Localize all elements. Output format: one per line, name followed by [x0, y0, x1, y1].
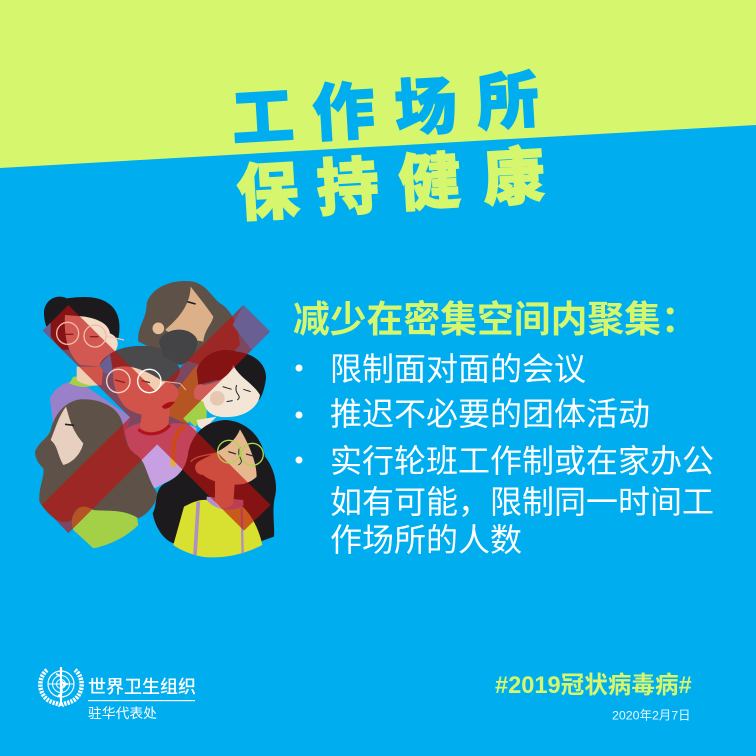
cross ends over background — [43, 305, 270, 373]
person: bottom left — [35, 399, 157, 548]
hashtag: #2019冠状病毒病# — [495, 672, 692, 699]
red cross-out — [42, 305, 271, 533]
title line 2: 健 — [397, 147, 463, 220]
icon: WHO emblem — [40, 667, 82, 706]
title line 1: 所 — [475, 66, 541, 139]
WHO logo: emblem and name — [40, 667, 196, 721]
title line 2: 保 — [235, 157, 301, 230]
title line 1: 工 — [230, 82, 296, 155]
bullet 3: 作场所的人数 — [330, 522, 522, 558]
bullet 3 — [296, 443, 714, 558]
bullet 1: 限制面对面的会议 — [330, 351, 586, 387]
person: top right — [138, 281, 240, 370]
body text panel — [293, 299, 714, 558]
office name: 驻华代表处 — [88, 706, 157, 721]
title line 1 — [230, 66, 541, 155]
person: top left — [44, 297, 130, 443]
title — [230, 66, 541, 155]
bullet 3: 实行轮班工作制或在家办公 — [330, 443, 714, 479]
date: 2020年2月7日 — [612, 708, 691, 722]
title line 2: 康 — [481, 142, 547, 215]
title line 2: 持 — [315, 152, 381, 225]
title line 2 — [235, 142, 547, 230]
bullet 3: 如有可能，限制同一时间工 — [330, 484, 714, 520]
person: bottom right — [153, 420, 276, 557]
title line 1: 场 — [393, 72, 459, 145]
person: centre — [99, 346, 197, 488]
lime diagonal banner — [0, 0, 756, 168]
glasses — [57, 322, 263, 465]
title line 1: 作 — [311, 77, 377, 150]
organisation name: 世界卫生组织 — [88, 677, 196, 697]
subheading: 减少在密集空间内聚集： — [293, 299, 698, 340]
bullet list — [296, 351, 714, 558]
illustration: crowd of people crossed out — [35, 281, 276, 557]
person: right — [160, 350, 266, 430]
dark hair overlap — [159, 330, 197, 365]
bullet 2: 推迟不必要的团体活动 — [330, 396, 650, 432]
